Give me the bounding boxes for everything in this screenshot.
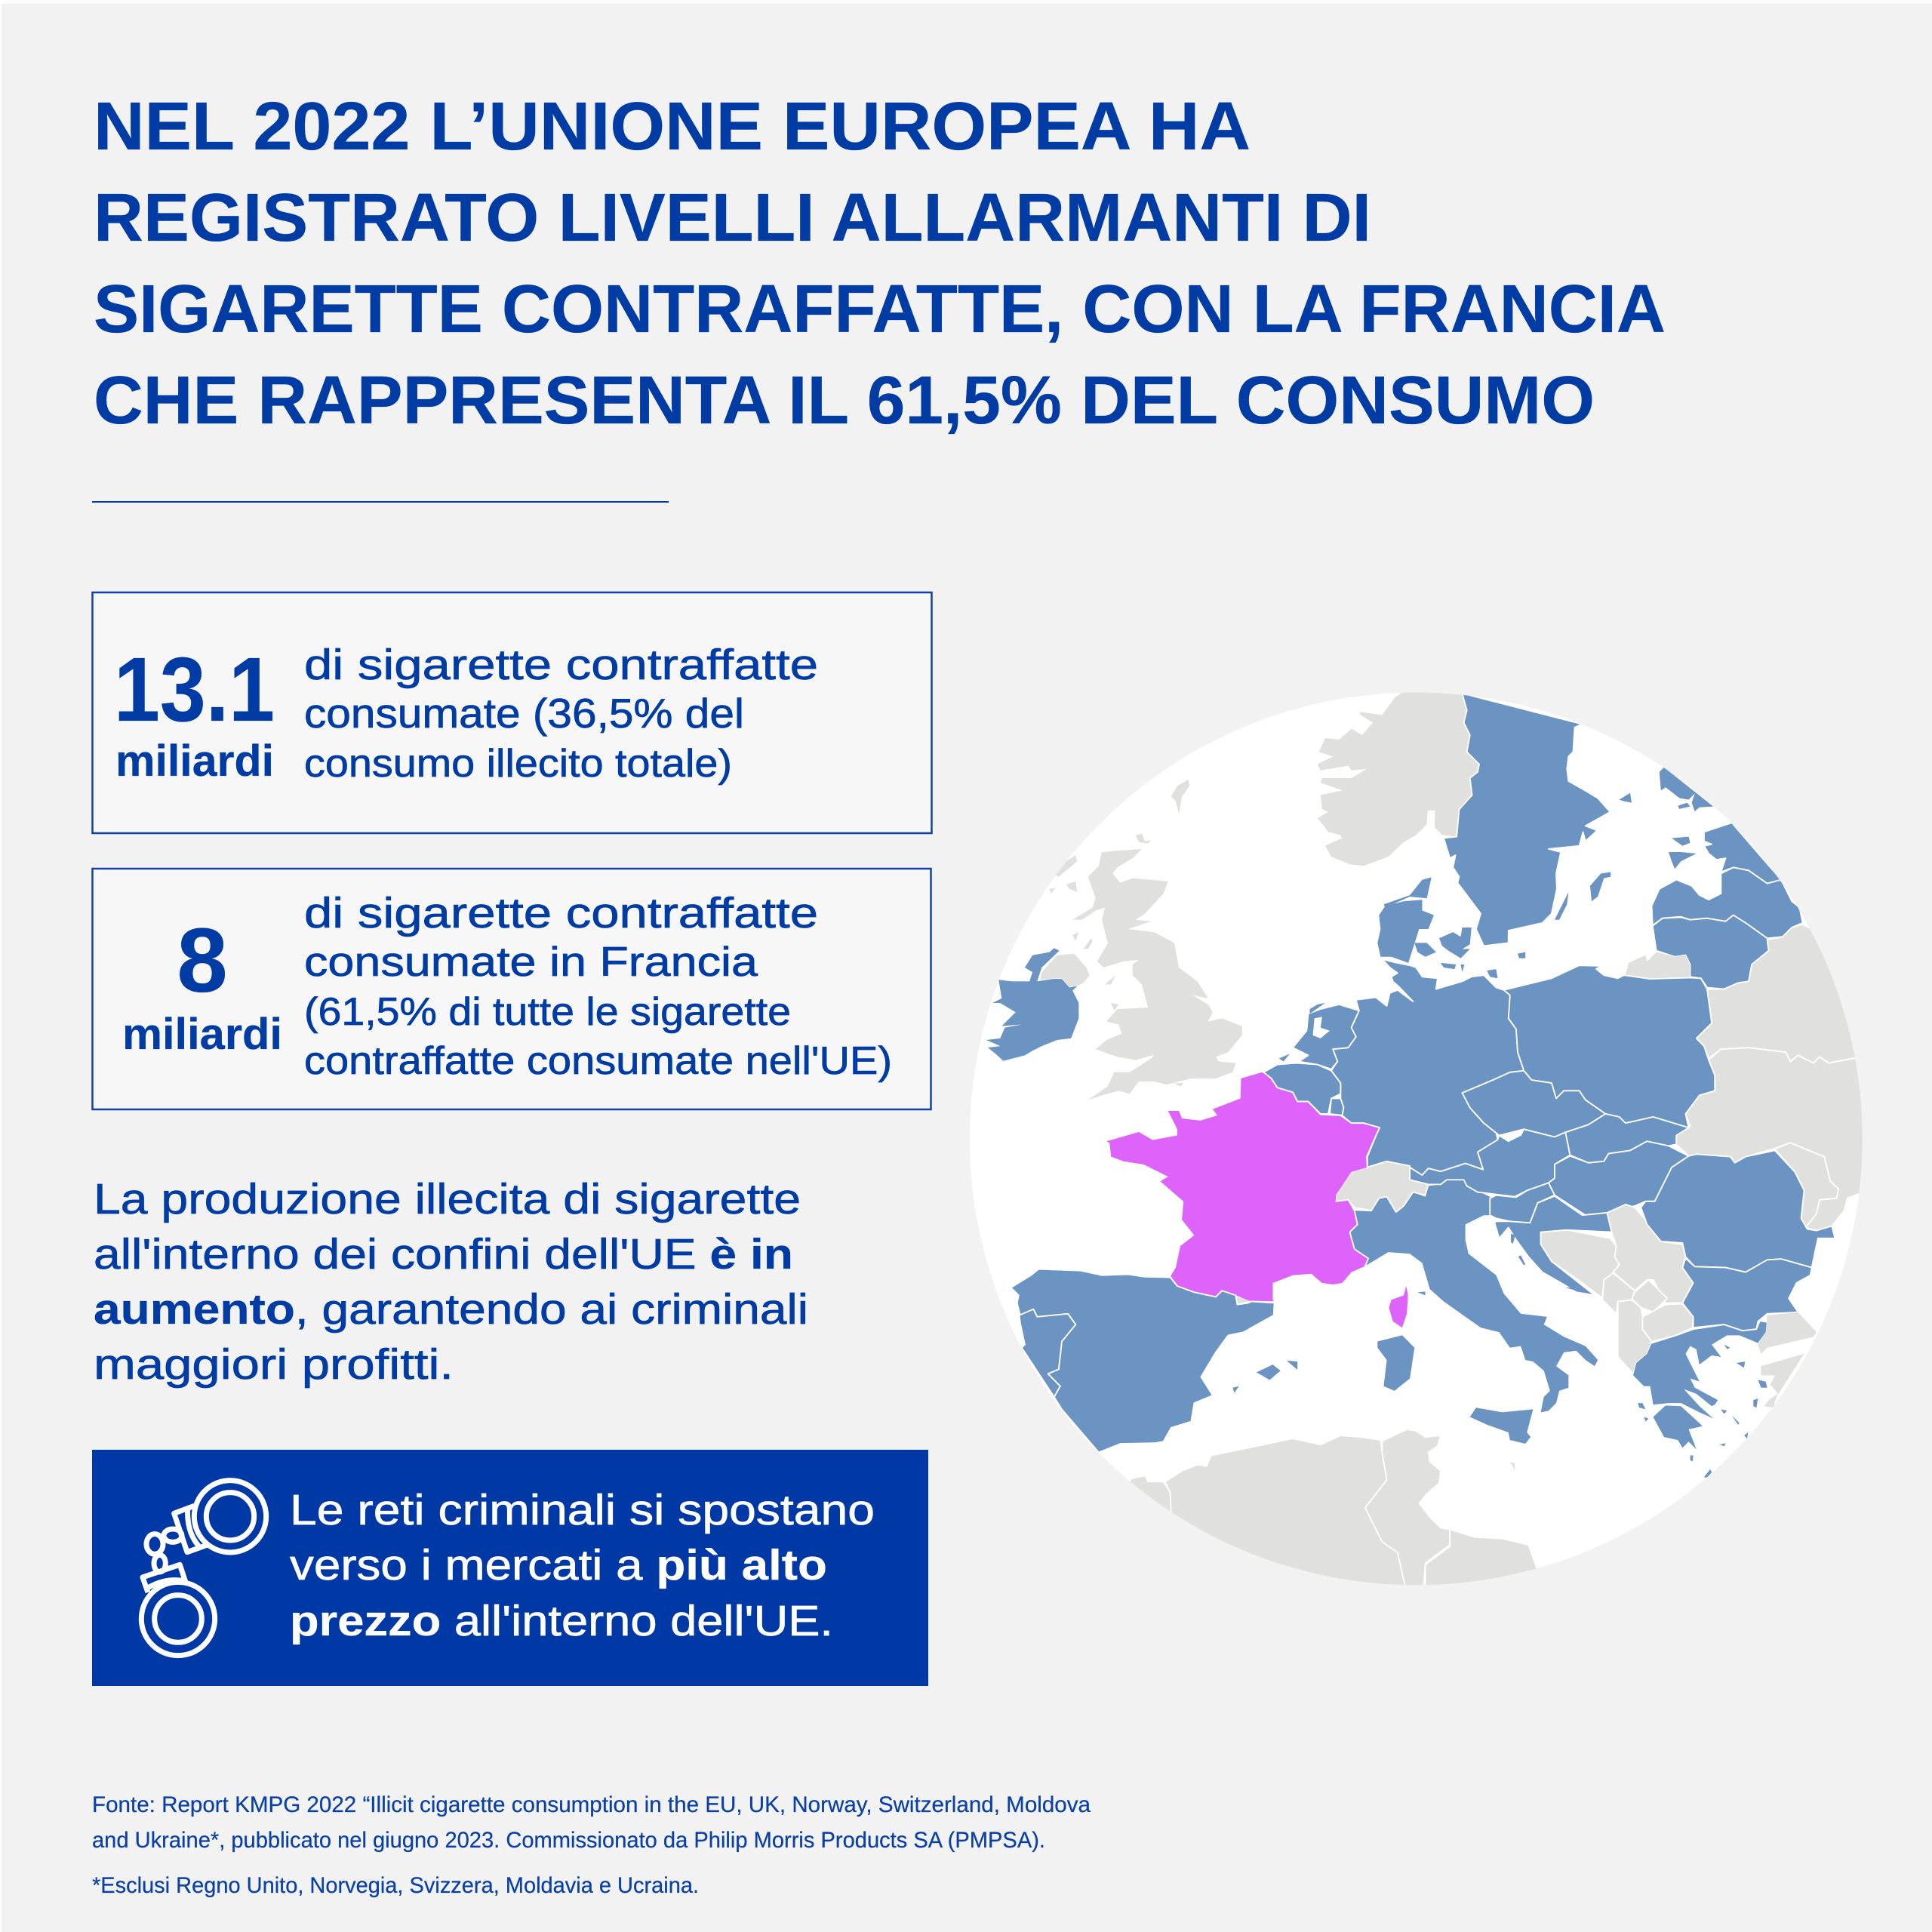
Sweden — [1444, 694, 1610, 946]
Italy — [1350, 1180, 1598, 1444]
Kosovo — [1632, 1280, 1667, 1312]
title: CHE RAPPRESENTA IL 61,5% DEL CONSUMO — [94, 363, 1595, 438]
Denmark — [1377, 877, 1525, 978]
stat number 8: 8 — [177, 909, 228, 1011]
Albania — [1618, 1300, 1652, 1374]
Ireland — [986, 948, 1078, 1061]
callout: criminal networks — [92, 1450, 928, 1686]
callout text: Le reti criminali si spostano — [290, 1486, 875, 1534]
France — [1106, 1072, 1408, 1327]
Czech Republic — [1463, 1071, 1605, 1137]
text block: illicit production: all'interno dei confini dell'UE è in — [94, 1230, 793, 1278]
stat number 13.1: 13.1 — [114, 638, 275, 740]
Romania — [1641, 1150, 1835, 1272]
Norway — [1318, 691, 1479, 866]
Great Britain — [1072, 849, 1242, 1100]
Portugal — [1020, 1309, 1075, 1397]
icon: handcuffs — [141, 1481, 266, 1656]
Ukraine — [1677, 1048, 1863, 1230]
Greek islands — [1638, 1345, 1767, 1478]
Turkey — [1758, 1312, 1817, 1407]
Switzerland — [1336, 1161, 1429, 1212]
Sicily — [1470, 1407, 1533, 1444]
Morocco — [1105, 1475, 1198, 1563]
Sardinia — [1377, 1291, 1426, 1391]
title: SIGARETTE CONTRAFFATTE, CON LA FRANCIA — [94, 272, 1666, 347]
Andorra — [1236, 1297, 1251, 1305]
Greece — [1633, 1321, 1769, 1478]
stat description: (61,5% di tutte le sigarette — [304, 990, 791, 1034]
source footnotes: Fonte: Report KMPG 2022 “Illicit cigarette consumption in the EU, UK, Norway, Switzerland, Moldova — [92, 1792, 1091, 1817]
Estonia — [1669, 823, 1781, 884]
title: NEL 2022 L’UNIONE EUROPEA HA — [94, 89, 1251, 165]
Swedish islands — [1555, 793, 1632, 920]
Luxembourg — [1330, 1098, 1343, 1115]
Austria — [1410, 1129, 1570, 1197]
Northern Ireland — [1040, 954, 1090, 987]
Latvia — [1652, 867, 1803, 938]
Belarus — [1697, 925, 1855, 1063]
callout text: verso i mercati a più alto — [290, 1541, 827, 1589]
source footnotes: *Esclusi Regno Unito, Norvegia, Svizzera, Moldavia e Ucraina. — [92, 1873, 699, 1898]
Hungary — [1549, 1141, 1689, 1215]
stat description: consumate in Francia — [304, 938, 758, 985]
Poland — [1504, 965, 1715, 1128]
Lithuania — [1653, 915, 1769, 989]
Spain — [1011, 1269, 1275, 1452]
stat description: consumate (36,5% del — [304, 690, 744, 737]
text block: illicit production: aumento , garantendo ai criminali — [94, 1285, 808, 1334]
Slovenia — [1490, 1183, 1555, 1223]
Peloponnese — [1654, 1405, 1703, 1449]
Finland — [1660, 768, 1713, 811]
Croatia — [1494, 1196, 1614, 1295]
France: Corsica — [1389, 1286, 1408, 1327]
Malta — [1510, 1462, 1515, 1471]
text block: illicit production: La produzione illecita di sigarette — [94, 1175, 801, 1223]
Balearic Islands — [1232, 1361, 1297, 1393]
Bulgaria — [1682, 1258, 1812, 1331]
Algeria — [1165, 1435, 1405, 1586]
Tunisia — [1365, 1429, 1450, 1586]
stat description: di sigarette contraffatte — [304, 889, 818, 937]
stat description — [304, 641, 818, 786]
Bosnia and Herzegovina — [1541, 1230, 1620, 1298]
callout text — [290, 1486, 875, 1645]
Serbia — [1607, 1204, 1694, 1303]
stat unit miliardi: miliardi — [115, 737, 274, 786]
text block: illicit production: maggiori profitti. — [94, 1340, 454, 1389]
Kaliningrad — [1626, 952, 1690, 979]
stat description: contraffatte consumate nell'UE) — [304, 1039, 892, 1083]
panel: stat 13.1 miliardi — [92, 592, 931, 833]
North Macedonia — [1642, 1304, 1694, 1342]
Libya — [1426, 1530, 1540, 1588]
source footnotes — [92, 1792, 1091, 1898]
Belgium — [1263, 1063, 1340, 1114]
Slovakia — [1565, 1114, 1689, 1163]
Netherlands — [1279, 1003, 1359, 1069]
Shetland, Orkney, Hebrides and UK islands — [1050, 780, 1189, 1087]
stat unit miliardi: miliardi — [122, 1010, 282, 1059]
stat description: di sigarette contraffatte — [304, 641, 818, 689]
map of Europe — [970, 691, 1884, 1588]
stat description — [304, 889, 892, 1083]
panel: stat 8 miliardi — [92, 869, 931, 1109]
source footnotes: and Ukraine*, pubblicato nel giugno 2023. Commissionato da Philip Morris Products SA (PMPSA). — [92, 1828, 1045, 1853]
title: REGISTRATO LIVELLI ALLARMANTI DI — [94, 180, 1371, 256]
title — [94, 89, 1666, 438]
Montenegro — [1602, 1273, 1635, 1314]
callout text: prezzo all'interno dell'UE. — [290, 1597, 833, 1645]
Moldova — [1775, 1143, 1838, 1228]
Germany — [1331, 959, 1524, 1175]
text block: illicit production — [94, 1175, 808, 1389]
stat description: consumo illecito totale) — [304, 742, 732, 786]
